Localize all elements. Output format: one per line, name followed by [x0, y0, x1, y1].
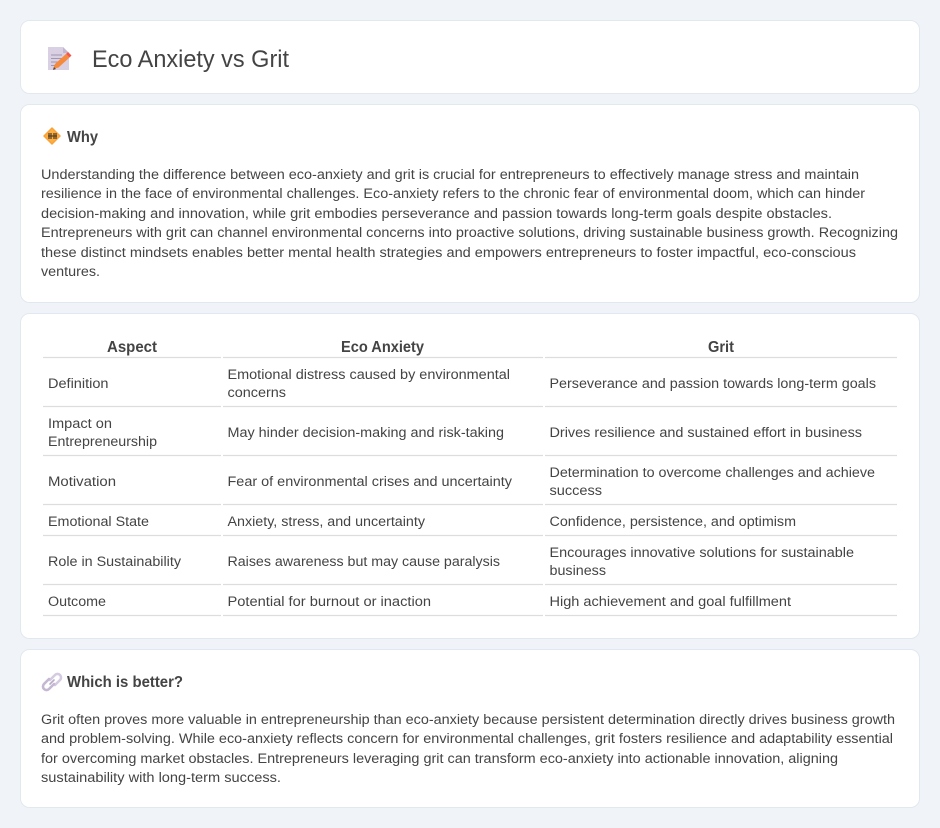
row: definition: concerns	[228, 385, 286, 401]
row: role in sustainability: Role in Sustainability	[48, 554, 182, 570]
text block: verdict paragraph: sustainability with long-term success.	[41, 770, 281, 786]
text block: why paragraph: these distinct mindsets enables better mental health strategies and empowers entrepreneurs to foster impactful, eco-conscious	[41, 245, 856, 261]
row: emotional state	[48, 514, 796, 530]
title: Eco Anxiety vs Grit	[92, 46, 289, 73]
text block: why paragraph: ventures.	[41, 264, 100, 280]
icon: diamond road sign	[44, 128, 60, 144]
table header row: Aspect	[107, 339, 158, 356]
heading: why: Why	[67, 129, 98, 146]
row: definition: Emotional distress caused by environmental	[228, 367, 510, 383]
row: impact on entrepreneurship: May hinder decision-making and risk-taking	[228, 425, 504, 441]
row: emotional state: Confidence, persistence, and optimism	[550, 514, 796, 530]
text block: why paragraph: decision-making and innovation, while grit embodies perseverance and passion towards long-term goals despite obstacles.	[41, 206, 832, 222]
text block: why paragraph: Understanding the difference between eco-anxiety and grit is crucial for entrepreneurs to effectively manage stress and maintain	[41, 167, 859, 183]
row: outcome: Outcome	[48, 594, 106, 610]
heading: which is better: Which is better?	[67, 674, 183, 691]
row: outcome: High achievement and goal fulfillment	[550, 594, 791, 610]
row: role in sustainability: Encourages innovative solutions for sustainable	[550, 545, 854, 561]
text block: why paragraph: Entrepreneurs with grit can channel environmental concerns into proactive solutions, driving sustainable business growth. Recognizing	[41, 225, 898, 241]
icon: document with pencil	[48, 47, 72, 70]
text block: verdict paragraph: Grit often proves more valuable in entrepreneurship than eco-anxiety because persistent determination directly drives business growth	[41, 712, 895, 728]
row: emotional state: Emotional State	[48, 514, 149, 530]
row: motivation: Determination to overcome challenges and achieve	[550, 465, 875, 481]
row: impact on entrepreneurship	[48, 416, 862, 450]
row: definition: Perseverance and passion towards long-term goals	[550, 376, 876, 392]
panel: header	[20, 20, 920, 94]
panel: why	[20, 104, 920, 302]
row: definition	[48, 367, 876, 401]
row: role in sustainability	[48, 545, 854, 579]
panel: comparison table	[20, 314, 920, 638]
text block: verdict paragraph	[41, 712, 895, 786]
table header row	[107, 339, 735, 356]
row: outcome: Potential for burnout or inaction	[228, 594, 431, 610]
row: motivation: Fear of environmental crises and uncertainty	[228, 474, 513, 490]
row: impact on entrepreneurship: Drives resilience and sustained effort in business	[550, 425, 862, 441]
row: motivation	[48, 465, 875, 499]
panel: which is better	[20, 650, 920, 808]
row: motivation: success	[550, 483, 602, 499]
table header row: Eco Anxiety	[341, 339, 424, 356]
row: role in sustainability: Raises awareness but may cause paralysis	[228, 554, 500, 570]
row: role in sustainability: business	[550, 563, 606, 579]
row: motivation: Motivation	[48, 474, 116, 490]
text block: verdict paragraph: for overcoming market obstacles. Entrepreneurs leveraging grit can transform eco-anxiety into actionable innovation, aligning	[41, 751, 838, 767]
table header row: Grit	[708, 339, 735, 356]
icon: chain link	[43, 674, 61, 690]
row: impact on entrepreneurship: Entrepreneurship	[48, 434, 157, 450]
text block: why paragraph	[41, 167, 898, 280]
row: definition: Definition	[48, 376, 108, 392]
row: impact on entrepreneurship: Impact on	[48, 416, 112, 432]
row: emotional state: Anxiety, stress, and uncertainty	[228, 514, 426, 530]
text block: why paragraph: resilience in the face of environmental challenges. Eco-anxiety refers to the chronic fear of environmental doom, which can hinder	[41, 186, 865, 202]
text block: verdict paragraph: and problem-solving. While eco-anxiety reflects concern for environmental challenges, grit fosters resilience and adaptability essential	[41, 731, 893, 747]
row: outcome	[48, 594, 791, 610]
